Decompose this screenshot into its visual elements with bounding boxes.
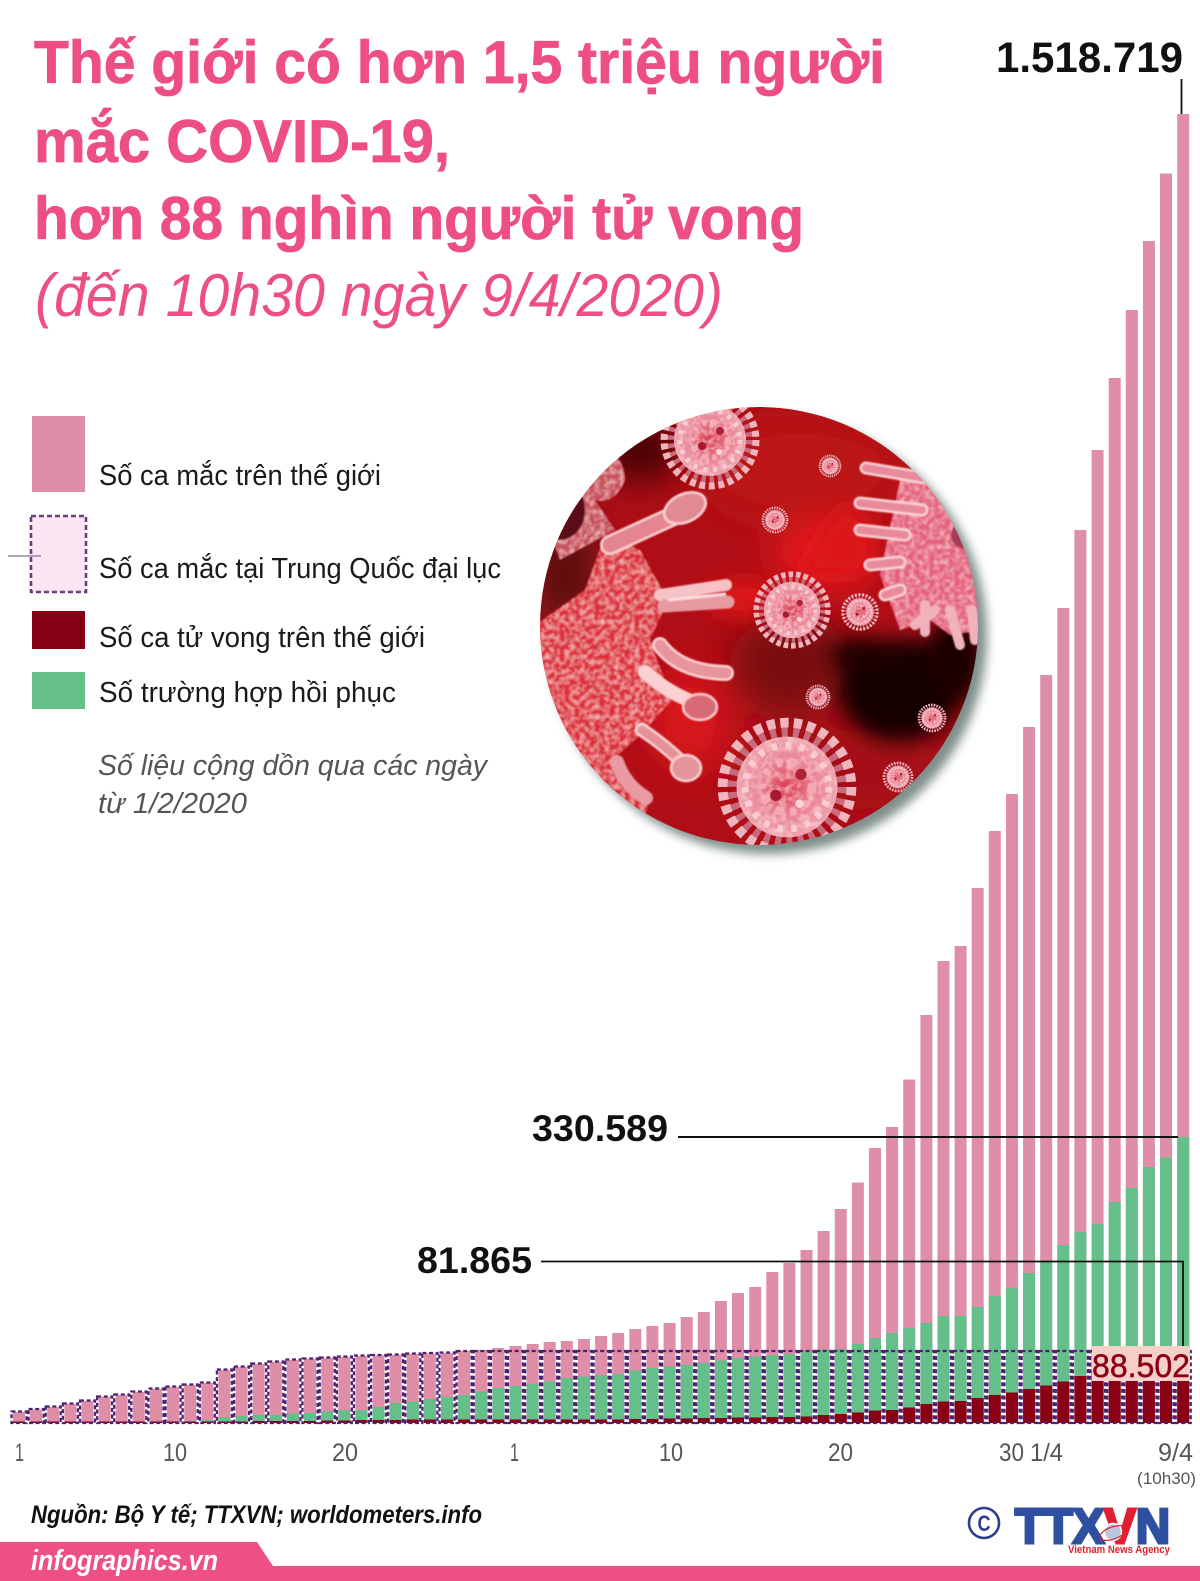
legend swatch: mainland China cases (31, 516, 86, 592)
callout: total cases: 1.518.719 (996, 34, 1183, 82)
finger arms (660, 585, 726, 595)
legend label: world cases: Số ca mắc trên thế giới (99, 459, 381, 492)
callout: recovered total: 330.589 (532, 1108, 668, 1149)
illustration: coronavirus circle (530, 394, 987, 854)
footer band (0, 1542, 1200, 1581)
series: mainland China cases dashed outlines (12, 1351, 1191, 1423)
title line 3: hơn 88 nghìn người tử vong (34, 185, 804, 252)
footer band: infographics.vn (31, 1545, 218, 1577)
x axis labels: 10 (163, 1439, 187, 1467)
legend label: deaths: Số ca tử vong trên thế giới (99, 622, 425, 654)
title (34, 29, 885, 329)
x axis labels: 1 (510, 1439, 519, 1467)
x axis labels: (10h30) (1137, 1469, 1196, 1488)
agency wordmark: TTXVN (1015, 1500, 1170, 1554)
copyright mark (969, 1508, 999, 1538)
circle image (530, 394, 985, 851)
legend tick (8, 555, 41, 557)
x axis labels: 10 (659, 1439, 683, 1467)
title line 1: Thế giới có hơn 1,5 triệu người (34, 29, 885, 96)
x axis labels: 20 (332, 1439, 358, 1467)
legend swatch: world cases (32, 416, 85, 492)
right virus (860, 468, 985, 645)
note text (98, 750, 488, 820)
logo: TTXVN (969, 1500, 1171, 1556)
upper arm (610, 512, 682, 545)
source text: Nguồn: Bộ Y tế; TTXVN; worldometers.info (31, 1501, 482, 1529)
title line 4: date: (đến 10h30 ngày 9/4/2020) (35, 262, 723, 329)
lower arms (660, 645, 726, 673)
callout: China total: 81.865 (417, 1240, 532, 1281)
big left virus (535, 440, 728, 830)
x axis labels: 1/4 (1030, 1439, 1063, 1467)
note text: từ 1/2/2020 (98, 788, 247, 820)
x axis labels: 9/4 (1158, 1439, 1193, 1467)
title line 2: mắc COVID-19, (34, 108, 450, 175)
copyright mark: C (978, 1511, 991, 1536)
x axis labels: 30 (999, 1439, 1024, 1467)
series: deaths (13, 1347, 1189, 1423)
callout: China total (417, 1240, 1183, 1346)
globe emblem (1098, 1523, 1128, 1543)
x axis labels: 1 (15, 1439, 24, 1467)
spiky virus particles (664, 394, 756, 486)
legend label: recovered: Số trường hợp hồi phục (99, 677, 396, 709)
series: recovered (184, 1137, 1189, 1423)
x axis labels (15, 1439, 1196, 1488)
legend (8, 416, 501, 709)
callout: deaths total: 88.502 (1092, 1348, 1190, 1384)
background colour blobs (530, 420, 950, 810)
agency tagline: Vietnam News Agency (1068, 1544, 1171, 1556)
upper lobe (554, 458, 626, 560)
legend swatch: recovered (32, 672, 85, 709)
legend label: mainland China cases: Số ca mắc tại Trung Quốc đại lục (99, 552, 501, 585)
body mass (535, 535, 672, 830)
legend swatch: deaths (32, 611, 85, 649)
x axis labels: 20 (828, 1439, 853, 1467)
circle shadow (549, 416, 987, 854)
note text: Số liệu cộng dồn qua các ngày (98, 750, 488, 782)
